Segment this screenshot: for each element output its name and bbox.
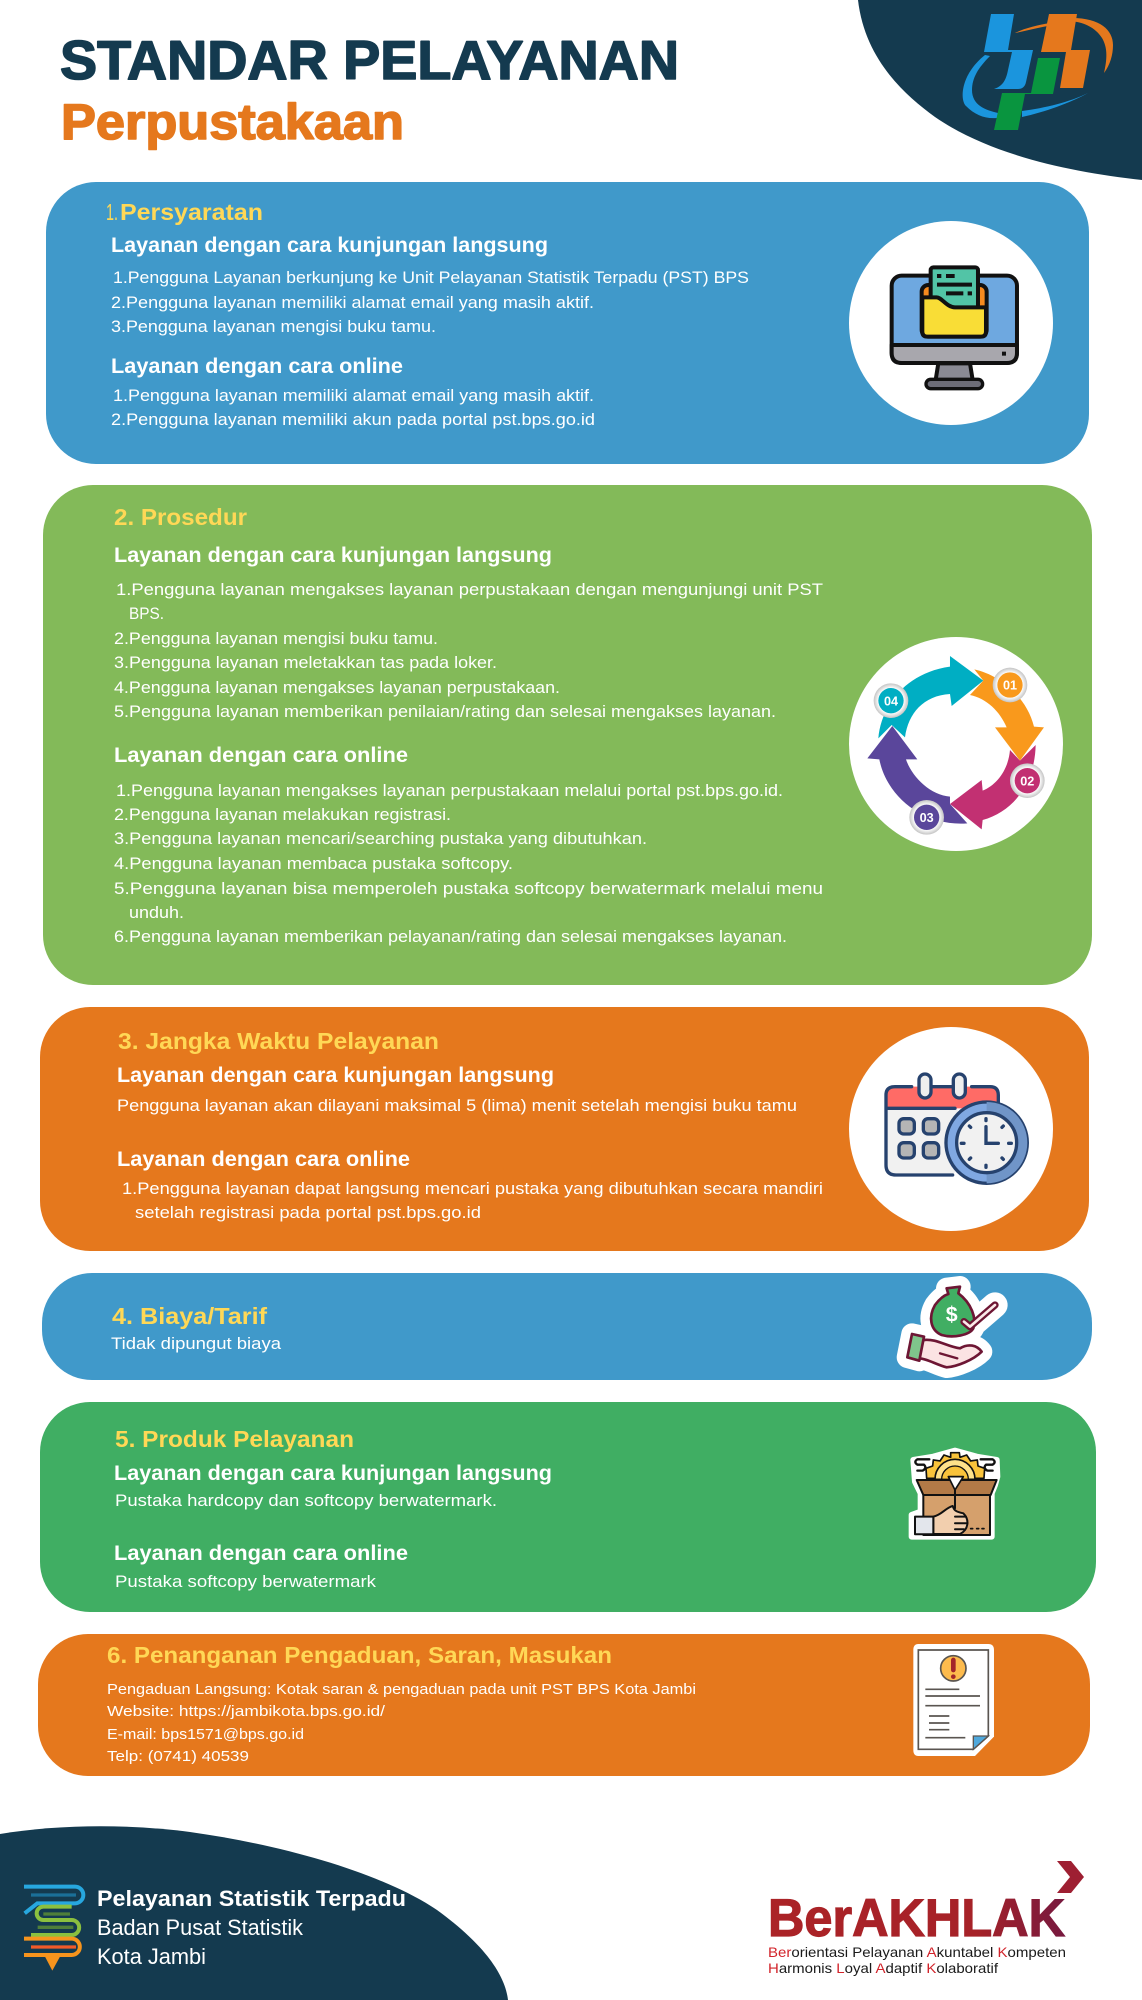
icon: complaint document [913, 1644, 994, 1756]
list: kunjungan langsung [114, 580, 823, 721]
list item: 1.Pengguna Layanan berkunjung ke Unit Pelayanan Statistik Terpadu (PST) BPS [113, 268, 749, 287]
logo tagline: Harmonis Loyal Adaptif Kolaboratif [768, 1960, 998, 1976]
body text: Pustaka softcopy berwatermark [115, 1572, 377, 1591]
badge 03: 03 [920, 811, 934, 825]
list item: 2.Pengguna layanan memiliki alamat email yang masih aktif. [111, 293, 594, 312]
icon: money bag on hand with check: $ [946, 1303, 958, 1327]
list: online: 3.Pengguna layanan mencari/searching pustaka yang dibutuhkan. [114, 829, 647, 848]
panel: prosedur [43, 485, 1092, 985]
list: kunjungan langsung: 5.Pengguna layanan memberikan penilaian/rating dan selesai mengakses layanan. [114, 702, 776, 721]
subheading: online: Layanan dengan cara online [117, 1148, 410, 1171]
panel background [40, 1007, 1089, 1251]
heading: 3. Jangka Waktu Pelayanan [118, 1028, 439, 1054]
badge 03 [909, 800, 944, 835]
list item: 2.Pengguna layanan memiliki akun pada portal pst.bps.go.id [111, 410, 595, 429]
list: online [114, 781, 823, 946]
heading: 1. [106, 199, 118, 225]
badge 04 [874, 683, 908, 718]
logo chevron [1057, 1861, 1084, 1893]
heading: 5. Produk Pelayanan [115, 1426, 354, 1452]
subheading: online: Layanan dengan cara online [114, 1542, 408, 1565]
heading: Persyaratan [120, 199, 263, 225]
panel: persyaratan [46, 182, 1089, 464]
logo wordmark: BerAKHLAK [768, 1889, 1065, 1948]
footer corner shape [0, 1826, 508, 2000]
contact details: E-mail: bps1571@bps.go.id [107, 1726, 304, 1743]
footer text: Badan Pusat Statistik [97, 1915, 304, 1940]
contact details: Website: https://jambikota.bps.go.id/ [107, 1703, 386, 1720]
logo tagline: Berorientasi Pelayanan Akuntabel Kompeten [768, 1944, 1066, 1960]
subheading: kunjungan langsung: Layanan dengan cara kunjungan langsung [111, 234, 548, 257]
icon: calendar and clock [886, 1074, 1027, 1183]
panel: penanganan pengaduan [38, 1634, 1090, 1776]
body text: 1.Pengguna layanan dapat langsung mencari pustaka yang dibutuhkan secara mandiri [122, 1179, 823, 1198]
panel background [40, 1402, 1096, 1612]
heading: 4. Biaya/Tarif [112, 1303, 267, 1329]
list item: 3.Pengguna layanan mengisi buku tamu. [111, 317, 436, 336]
body text: setelah registrasi pada portal pst.bps.go.id [135, 1203, 481, 1222]
subheading: online: Layanan dengan cara online [111, 355, 403, 378]
contact details [107, 1681, 696, 1765]
list: online: 5.Pengguna layanan bisa memperoleh pustaka softcopy berwatermark melalui menu [114, 879, 823, 898]
badge 01 [993, 668, 1027, 702]
footer text: Pelayanan Statistik Terpadu [97, 1886, 406, 1911]
footer text [97, 1886, 406, 1969]
list: online: 4.Pengguna layanan membaca pustaka softcopy. [114, 854, 513, 873]
list: kunjungan langsung: BPS. [129, 604, 164, 623]
subheading: kunjungan langsung: Layanan dengan cara kunjungan langsung [114, 1462, 552, 1485]
heading: 2. Prosedur [114, 504, 247, 530]
panel background [42, 1273, 1092, 1380]
list: kunjungan langsung: 4.Pengguna layanan mengakses layanan perpustakaan. [114, 678, 560, 697]
list: kunjungan langsung: 2.Pengguna layanan mengisi buku tamu. [114, 629, 438, 648]
body text [122, 1179, 823, 1222]
logo tagline [768, 1944, 1066, 1976]
badge 01: 01 [1003, 679, 1017, 693]
contact details: Pengaduan Langsung: Kotak saran & pengaduan pada unit PST BPS Kota Jambi [107, 1681, 696, 1698]
icon: BPS logo [963, 14, 1113, 130]
contact details: Telp: (0741) 40539 [107, 1748, 249, 1765]
heading: 6. Penanganan Pengaduan, Saran, Masukan [107, 1642, 612, 1668]
subheading: online: Layanan dengan cara online [114, 744, 408, 767]
icon: four-step cycle [867, 656, 1045, 835]
icon: open box with gear and hand [912, 1451, 997, 1537]
panel: produk pelayanan [40, 1402, 1096, 1612]
title: STANDAR PELAYANAN [60, 29, 679, 91]
icon circle [849, 221, 1053, 425]
icon circle [849, 637, 1063, 851]
panel background [43, 485, 1092, 985]
body text: Pengguna layanan akan dilayani maksimal 5 (lima) menit setelah mengisi buku tamu [117, 1096, 797, 1115]
list: online: 1.Pengguna layanan mengakses layanan perpustakaan melalui portal pst.bps.go.id. [116, 781, 783, 800]
icon: money bag on hand with check [907, 1287, 995, 1367]
list: online: 2.Pengguna layanan melakukan registrasi. [114, 805, 451, 824]
header corner shape [858, 0, 1142, 180]
subheading: kunjungan langsung: Layanan dengan cara kunjungan langsung [117, 1064, 554, 1087]
list: kunjungan langsung: 1.Pengguna layanan mengakses layanan perpustakaan dengan mengunjungi unit PST [116, 580, 823, 599]
list: online: 6.Pengguna layanan memberikan pelayanan/rating dan selesai mengakses layanan. [114, 927, 787, 946]
panel background [38, 1634, 1090, 1776]
panel: jangka waktu [40, 1007, 1089, 1251]
icon circle [849, 1027, 1053, 1231]
subheading: kunjungan langsung: Layanan dengan cara kunjungan langsung [114, 544, 552, 567]
panel background [46, 182, 1089, 464]
body text: Tidak dipungut biaya [111, 1334, 282, 1353]
footer text: Kota Jambi [97, 1944, 206, 1969]
subtitle: Perpustakaan [61, 94, 404, 150]
list: online: unduh. [129, 903, 184, 922]
list: kunjungan langsung: 3.Pengguna layanan meletakkan tas pada loker. [114, 653, 497, 672]
panel: biaya tarif [42, 1273, 1092, 1380]
badge 04: 04 [884, 694, 898, 708]
body text: Pustaka hardcopy dan softcopy berwatermark. [115, 1491, 497, 1510]
logo: BerAKHLAK [768, 1861, 1084, 1976]
list item: 1.Pengguna layanan memiliki alamat email yang masih aktif. [113, 386, 594, 405]
icon: monitor with folder [892, 267, 1017, 389]
badge 02: 02 [1020, 774, 1034, 788]
icon: stacked books [24, 1887, 83, 1971]
badge 02 [1010, 763, 1045, 798]
